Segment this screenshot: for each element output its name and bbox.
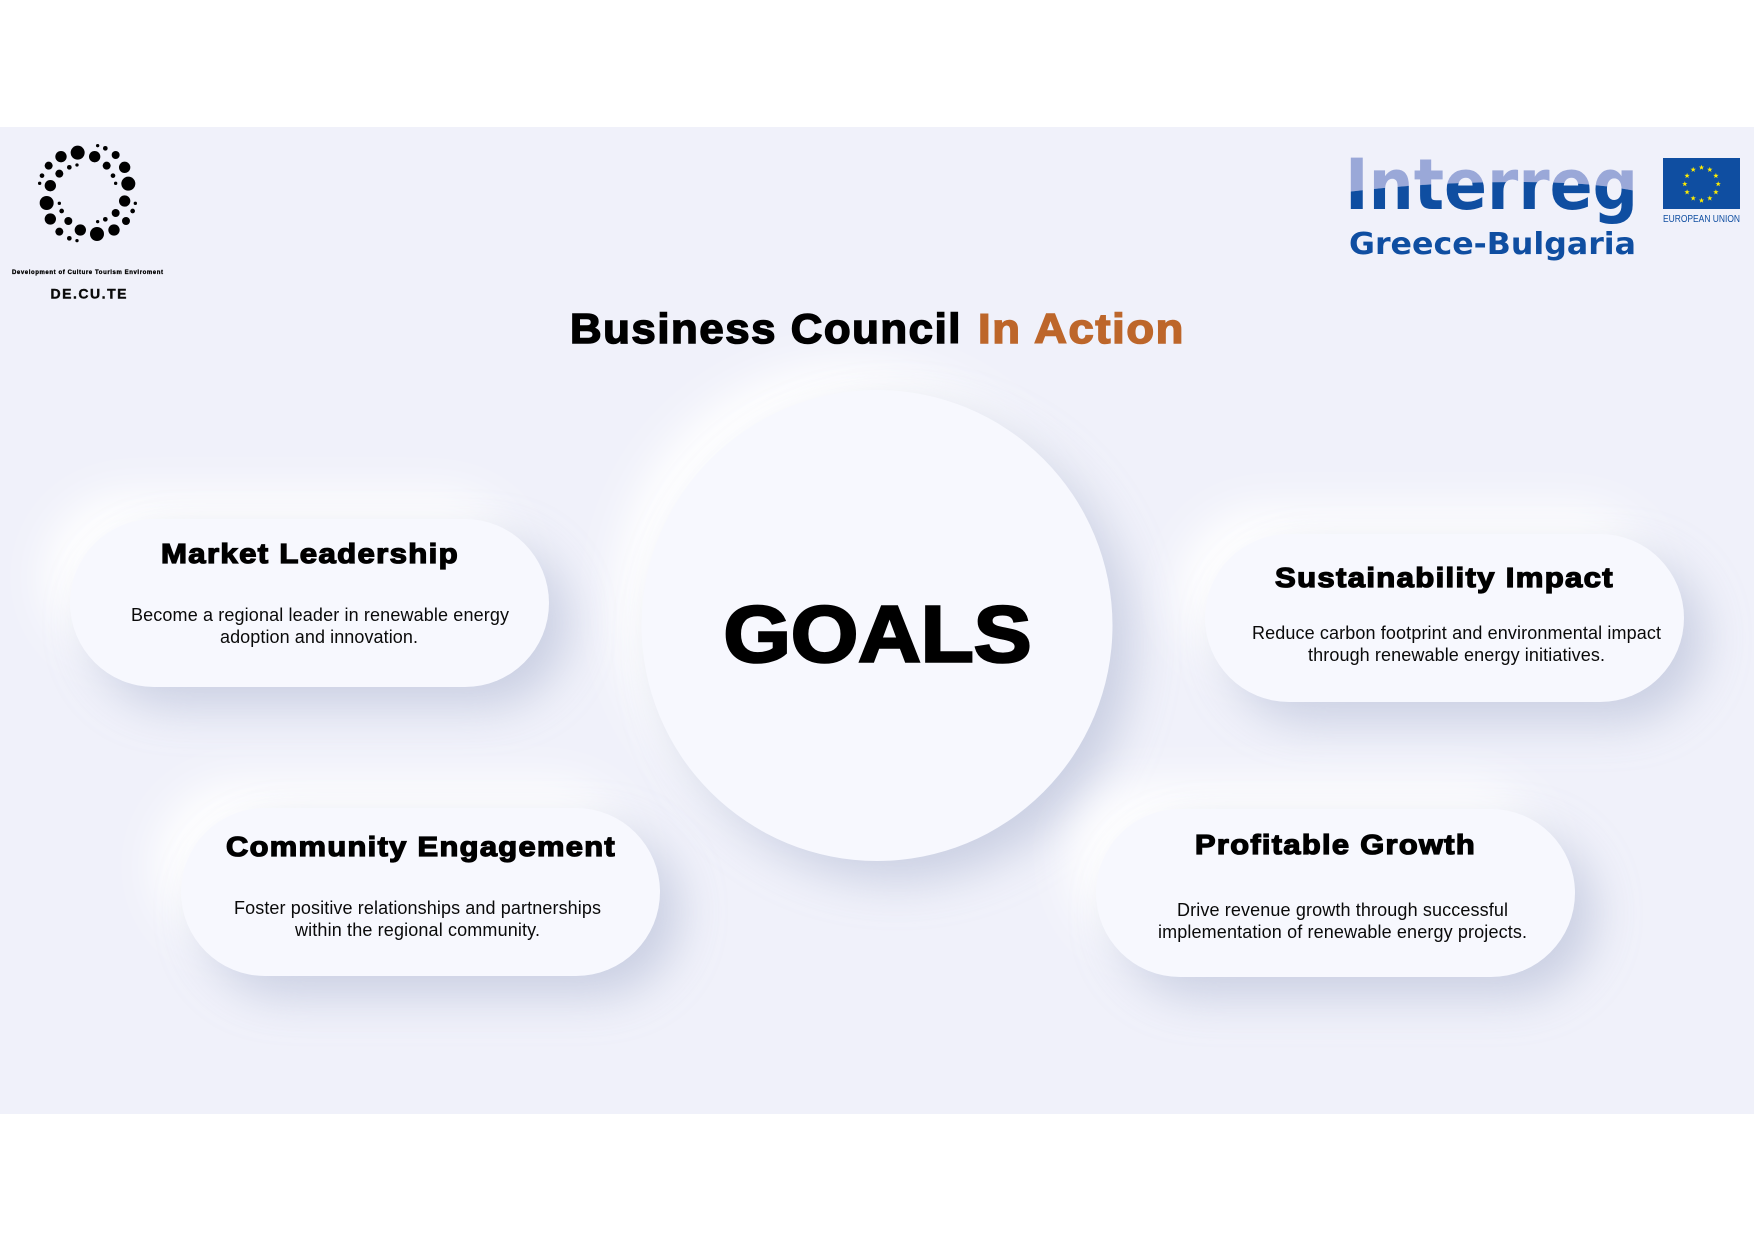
icon: dot ring: [38, 144, 137, 242]
sustainability heading: Sustainability Impact: [1275, 562, 1614, 593]
community heading: Community Engagement: [226, 831, 616, 862]
panel: community engagement: [155, 782, 680, 996]
logo: European Union flag: [1663, 158, 1740, 225]
panel: market leadership: [44, 493, 569, 707]
sustainability text: through renewable energy initiatives.: [1308, 645, 1605, 665]
flag caption: EUROPEAN UNION: [1663, 214, 1740, 225]
goals label: GOALS: [724, 590, 1032, 678]
profitable text: Drive revenue growth through successful: [1177, 900, 1508, 920]
Interreg wordmark: Interreg: [1345, 144, 1638, 226]
logo: Interreg Greece-Bulgaria: [1350, 158, 1634, 260]
market leadership text: adoption and innovation.: [220, 627, 418, 647]
market leadership text: Become a regional leader in renewable energy: [131, 605, 509, 625]
background band: [0, 127, 1754, 1114]
title: Business Council: [570, 305, 962, 352]
Interreg wordmark: Interreg: [1345, 144, 1638, 226]
profitable text: implementation of renewable energy projects.: [1158, 922, 1527, 942]
Greece-Bulgaria: Greece-Bulgaria: [1349, 227, 1636, 262]
sustainability text: Reduce carbon footprint and environmental impact: [1252, 623, 1661, 643]
panel: profitable growth: [1070, 783, 1595, 997]
logo name: DE.CU.TE: [50, 286, 126, 302]
panel: sustainability impact: [1179, 508, 1704, 722]
title: In Action: [978, 305, 1185, 352]
community text: within the regional community.: [294, 920, 540, 940]
market leadership heading: Market Leadership: [161, 538, 459, 569]
logo tagline: Development of Culture Tourism Enviroment: [12, 270, 163, 276]
panel: goals circle: [615, 363, 1133, 881]
community text: Foster positive relationships and partnerships: [234, 898, 601, 918]
profitable heading: Profitable Growth: [1195, 829, 1476, 860]
logo: DE.CU.TE: [12, 144, 163, 302]
